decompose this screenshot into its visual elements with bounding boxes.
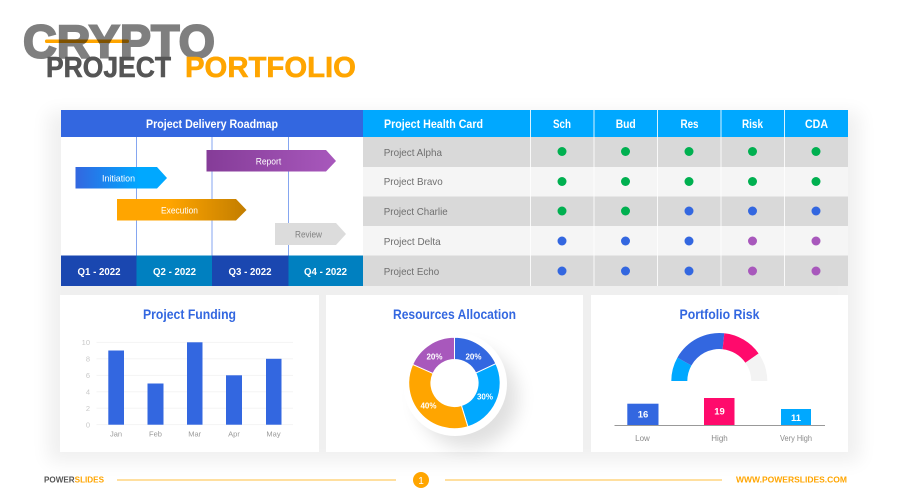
table header <box>384 117 828 131</box>
quarter timeline: Q1 - 2022 <box>78 266 121 278</box>
risk bars: 11 <box>791 413 802 424</box>
arrow: report: Report <box>256 156 282 168</box>
table header: CDA <box>805 117 828 131</box>
panel: project health card <box>363 110 848 286</box>
table header: Bud <box>616 117 636 131</box>
bar chart: 6 <box>86 371 90 380</box>
arrow: execution <box>117 199 246 220</box>
project names: Project Delta <box>384 236 441 248</box>
status dots <box>558 147 820 276</box>
donut chart: 30% <box>477 392 493 402</box>
gauge chart <box>671 333 767 381</box>
panel: project delivery roadmap: Project Delivery Roadmap <box>146 117 278 131</box>
arrow: initiation: Initiation <box>102 174 135 184</box>
footer <box>44 472 847 488</box>
risk bars: High <box>711 434 728 443</box>
bar chart: Feb <box>149 430 162 438</box>
quarter timeline: Q4 - 2022 <box>304 266 347 278</box>
arrow: review: Review <box>295 230 322 240</box>
footer: 1 <box>418 476 424 487</box>
quarter timeline: Q3 - 2022 <box>228 266 272 278</box>
bar chart: Apr <box>228 430 240 438</box>
project names: Project Charlie <box>384 206 448 218</box>
quarter timeline: Q2 - 2022 <box>153 266 196 278</box>
footer: WWW.POWERSLIDES.COM <box>736 474 847 484</box>
title: CRYPTO <box>23 16 215 68</box>
project names: Project Bravo <box>384 176 443 188</box>
bar chart: 2 <box>86 404 90 413</box>
arrow: report <box>206 150 336 172</box>
panel: portfolio risk: Portfolio Risk <box>680 306 760 322</box>
table header: Sch <box>553 117 571 131</box>
title: PROJECT <box>46 52 171 84</box>
donut chart: 20% <box>426 352 443 362</box>
arrow: review <box>275 223 346 245</box>
risk bars: 16 <box>638 410 648 420</box>
title: PORTFOLIO <box>185 52 356 84</box>
table header: Res <box>680 117 699 131</box>
bar chart <box>82 338 293 438</box>
bar chart: Jan <box>110 430 122 438</box>
bar chart: 0 <box>86 420 90 430</box>
panel: project funding <box>60 295 319 452</box>
donut chart: 20% <box>465 352 482 362</box>
bar chart: Mar <box>188 430 202 438</box>
footer: POWERSLIDES <box>44 474 104 484</box>
risk bars <box>614 398 825 443</box>
title <box>23 16 356 84</box>
arrow: execution: Execution <box>161 206 198 216</box>
risk bars: Very High <box>780 434 812 443</box>
project names: Project Alpha <box>384 147 442 159</box>
table header: Project Health Card <box>384 117 483 131</box>
quarter timeline <box>61 256 363 286</box>
risk bars: 19 <box>714 406 725 418</box>
table header: Risk <box>742 117 763 131</box>
panel: portfolio risk <box>591 295 848 452</box>
panel: project delivery roadmap <box>61 110 363 286</box>
panel: resources allocation: Resources Allocation <box>393 306 516 322</box>
donut chart: 40% <box>420 402 437 410</box>
panel: resources allocation <box>326 295 583 452</box>
bar chart: 10 <box>82 338 90 347</box>
donut chart <box>409 337 500 429</box>
project names: Project Echo <box>384 266 439 278</box>
arrow: initiation <box>76 167 167 188</box>
panel: project funding: Project Funding <box>143 306 236 322</box>
bar chart: 8 <box>86 354 90 364</box>
risk bars: Low <box>635 434 650 443</box>
project names <box>384 147 448 278</box>
bar chart: May <box>266 430 281 438</box>
bar chart: 4 <box>86 388 90 396</box>
